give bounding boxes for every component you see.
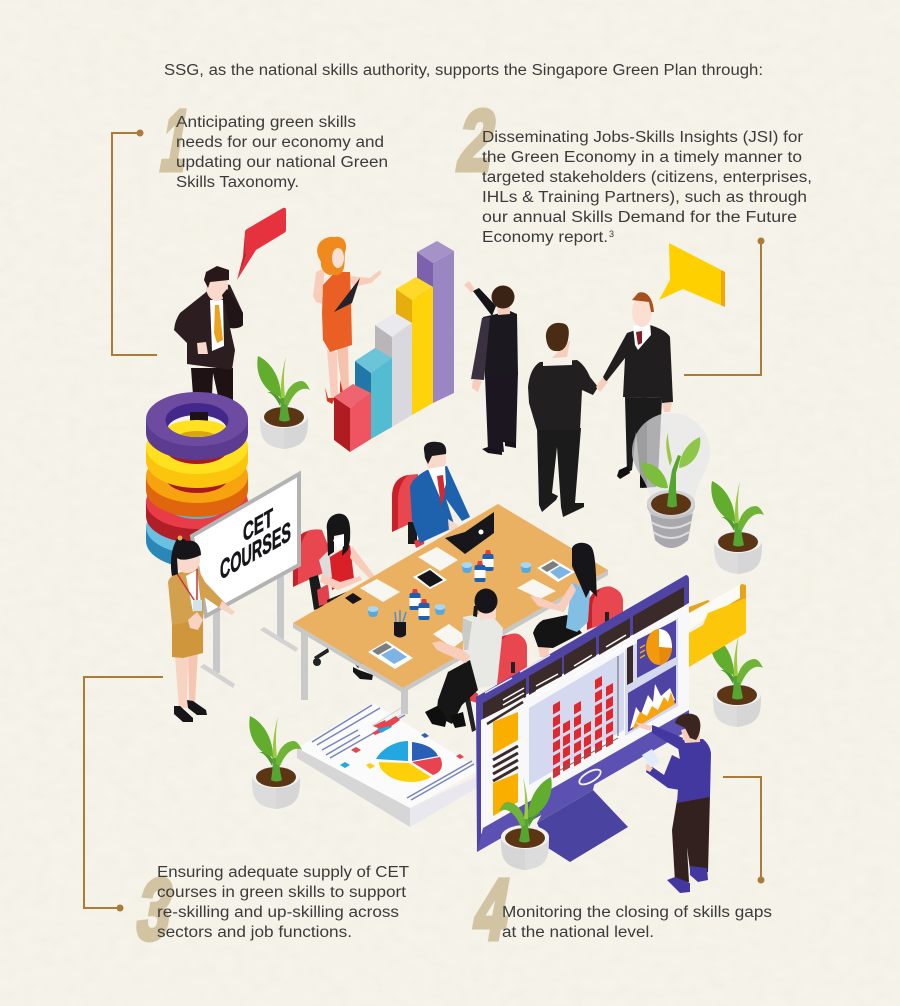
text block 2: IHLs & Training Partners), such as through [482,189,807,206]
potted plant 5 [499,777,552,870]
red bar grid [553,676,613,778]
table items: cups [368,562,532,617]
connector bracket 4 [723,777,764,884]
connector bracket 1 [112,130,157,355]
right widget panel [625,618,678,736]
text block 1: Skills Taxonomy. [176,174,299,191]
connector bracket 3 [84,677,163,912]
text block 2: our annual Skills Demand for the Future [482,209,797,226]
meeting table [293,504,608,714]
figure: man shaking hands, back view [528,323,598,517]
text block 3: Ensuring adequate supply of CET [157,864,410,881]
table items: laptop [445,512,494,554]
figure: man touching monitor [635,714,711,893]
text block 1 [176,114,388,191]
left column widgets [487,702,523,816]
figure: blue-suit man with chair [392,442,470,548]
bar chart: isometric columns [334,241,454,452]
stacked rings [146,392,248,568]
figure: seated man in white [425,588,527,732]
monitor stand [537,760,628,862]
text block 4 [502,904,772,941]
light bulb with seedling [632,413,710,548]
text block 2: Economy report. [482,229,608,246]
text block 4: Monitoring the closing of skills gaps [502,904,772,921]
screen header cells [483,587,684,719]
figure: woman in red vest with chair [293,514,376,680]
potted plant 1 [257,356,310,449]
text block 3 [157,864,410,941]
numeral 3: 3 [131,863,179,958]
table items: booklets [368,559,575,669]
main chart panel [529,652,624,785]
figure: woman at right of table [530,543,623,657]
board text: CET: CET [243,502,273,548]
header cell lines [503,635,626,710]
table items: papers [360,547,556,648]
text block 2: Disseminating Jobs-Skills Insights (JSI) for [482,129,803,146]
mountain chart widget [628,665,676,732]
text block 3: sectors and job functions. [157,924,352,941]
numeral 4: 4 [468,863,516,958]
text block 3: re-skilling and up-skilling across [157,904,399,921]
numeral 2: 2 [452,94,502,189]
text block 2 [482,129,812,246]
speech bubble: yellow [659,243,725,307]
connector bracket 2 [684,238,764,375]
text block 2: 3 [609,229,614,239]
potted plant 2 [711,481,764,574]
figure: presenter woman [168,536,235,722]
text block 3: courses in green skills to support [157,884,407,901]
figure: man in suit, front view [596,292,673,488]
text block 4: at the national level. [502,924,654,941]
text block 1: needs for our economy and [176,134,384,151]
potted plant 4 [710,634,763,727]
table items: tablet and phone [345,568,447,604]
text block 1: Anticipating green skills [176,114,356,131]
table items: bottles [410,550,494,620]
figure: man on phone [174,266,243,400]
computer monitor with dashboard [476,575,689,852]
monitor button [577,767,603,787]
table items: pencil cup [394,610,406,638]
board text: COURSES: COURSES [220,516,291,586]
heading: SSG, as the national skills authority, supports the Singapore Green Plan through: [164,62,763,79]
text block 2: targeted stakeholders (citizens, enterprises, [482,169,812,186]
report stack with pie chart [297,703,480,827]
text block 1: updating our national Green [176,154,388,171]
numeral 1: 1 [155,94,196,189]
file folder [689,584,746,667]
figure: woman with tablet [313,237,381,404]
presentation board: CET COURSES [192,474,299,688]
figure: man pointing, back view [464,281,518,455]
speech bubble: red [237,208,286,280]
pie chart widget [627,620,676,685]
text block 2: the Green Economy in a timely manner to [482,149,802,166]
potted plant 3 [249,716,302,809]
